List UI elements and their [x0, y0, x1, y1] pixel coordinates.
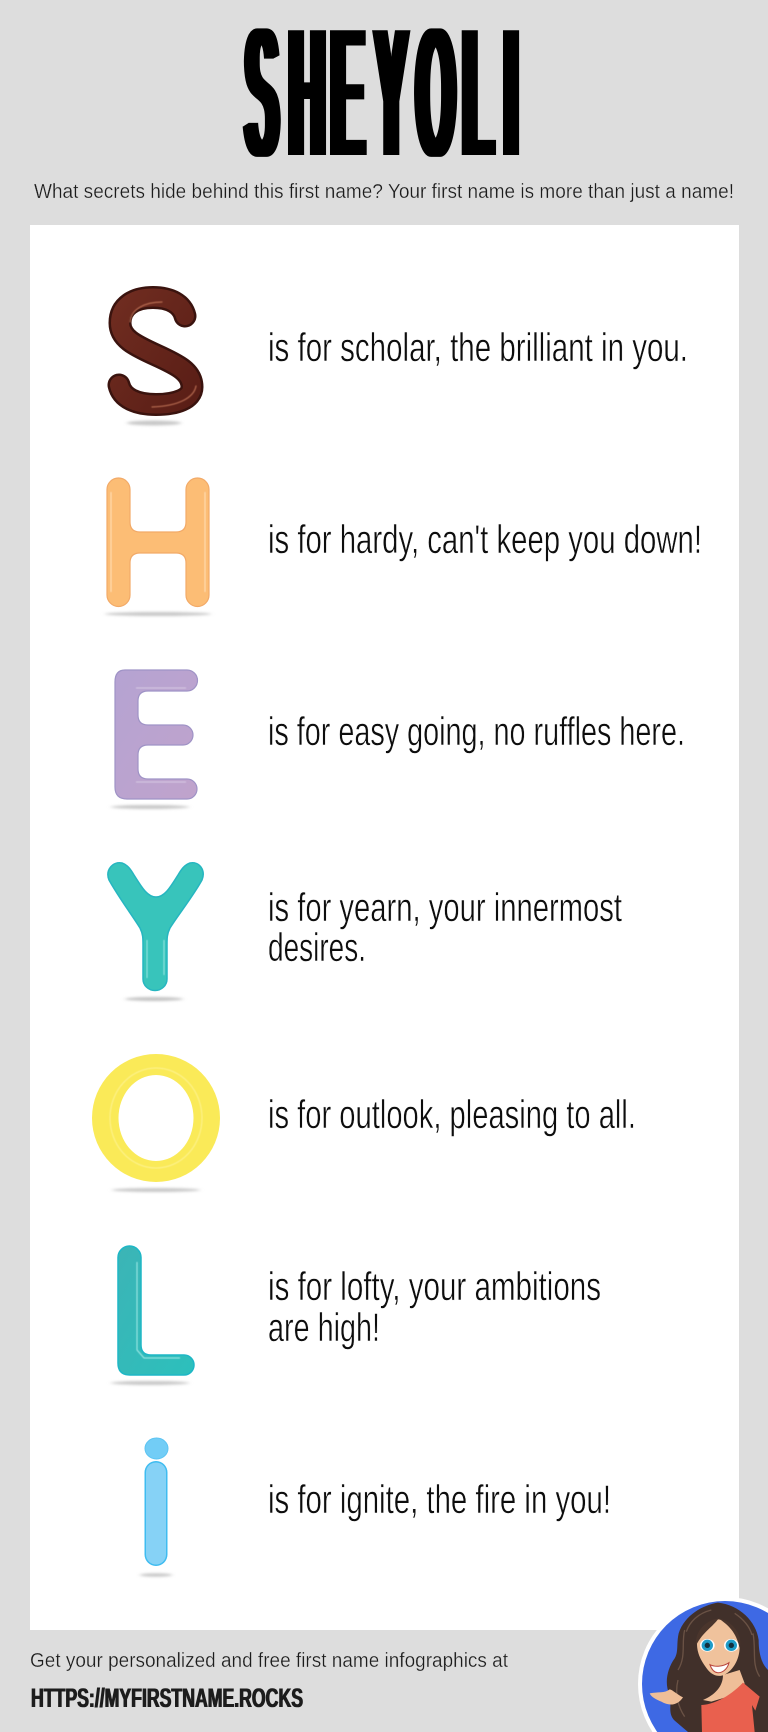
text: L lines: are high! — [268, 1306, 380, 1350]
row: L — [111, 1246, 605, 1385]
row: Y — [108, 863, 626, 1001]
footer text: Get your personalized and free first name infographics at — [30, 1650, 508, 1672]
avatar hair strand — [696, 1618, 740, 1648]
icon: letter L — [111, 1246, 194, 1385]
avatar arm and hand — [650, 1689, 683, 1705]
row: S — [119, 298, 688, 426]
text: L lines: is for lofty, your ambitions — [268, 1265, 601, 1309]
icon: letter S — [119, 298, 196, 426]
avatar eyes — [700, 1639, 739, 1652]
row: I — [140, 1438, 611, 1577]
panel: letters — [30, 225, 739, 1630]
row: H — [105, 478, 702, 616]
text: O line: is for outlook, pleasing to all. — [268, 1093, 636, 1137]
icon: letter Y — [108, 863, 203, 1001]
text: Y lines: desires. — [268, 926, 366, 970]
text: Y lines: is for yearn, your innermost — [268, 886, 622, 930]
row: O — [92, 1054, 636, 1192]
avatar hair highlights — [677, 1610, 760, 1717]
avatar shirt — [701, 1683, 760, 1732]
row: E — [111, 670, 685, 809]
icon: letter i — [140, 1438, 172, 1577]
icon: letter H — [105, 478, 211, 616]
avatar face — [697, 1619, 740, 1676]
avatar: woman in circle — [638, 1597, 768, 1732]
icon: letter O — [92, 1054, 220, 1192]
avatar mouth — [710, 1663, 729, 1673]
text: I line: is for ignite, the fire in you! — [268, 1478, 611, 1522]
icon: letter E — [111, 670, 198, 809]
avatar neck — [703, 1670, 745, 1702]
footer url: HTTPS://MYFIRSTNAME.ROCKS — [31, 1683, 303, 1713]
subtitle: What secrets hide behind this first name? Your first name is more than just a name! — [34, 181, 734, 203]
avatar hair — [667, 1603, 768, 1732]
